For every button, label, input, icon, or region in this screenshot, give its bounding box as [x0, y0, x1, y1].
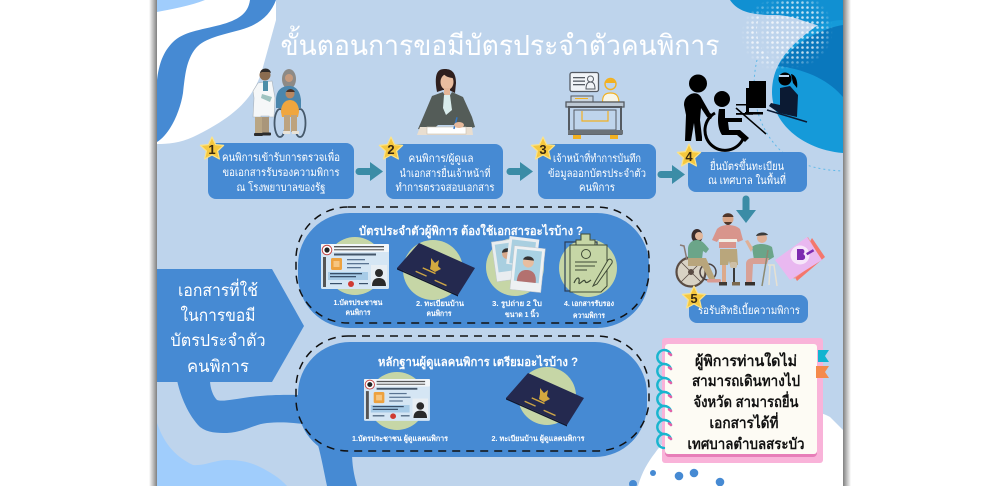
caregiver doc 1: ID card — [352, 372, 449, 444]
step 3 box — [538, 144, 656, 199]
step 5 box — [689, 295, 808, 323]
step 2 star badge — [379, 137, 403, 159]
side arrow label: documents used: บัตรประจำตัว — [170, 331, 266, 350]
illustration: woman writing at desk — [417, 69, 475, 135]
arrow 3 to 4 — [658, 165, 685, 184]
decorative bottom-right hill with dots — [629, 408, 843, 486]
note text: เทศบาลตำบลสระบัว — [688, 436, 804, 453]
doc 4: disability certificate clipboard — [559, 234, 617, 320]
caregiver doc 1: ID card: 1.บัตรประชาชน ผู้ดูแลคนพิการ — [352, 434, 449, 444]
doc 3: photos — [486, 236, 545, 319]
side arrow label: documents used: คนพิการ — [187, 357, 249, 376]
step 5 box: รอรับสิทธิเบี้ยความพิการ — [698, 302, 800, 317]
page shadow right — [843, 0, 851, 486]
doc 3: photos: ขนาด 1 นิ้ว — [505, 308, 539, 319]
step 4 box — [688, 152, 807, 192]
caregiver doc 2: house registration — [492, 367, 585, 444]
step 3 star badge — [531, 137, 555, 159]
step 5 star badge — [682, 286, 706, 308]
decorative bottom-left wave — [157, 380, 357, 486]
panel: caregiver documents — [296, 336, 649, 457]
step 4 star badge — [677, 144, 701, 166]
note text: เอกสารได้ที่ — [710, 412, 779, 432]
decorative top-left swoosh — [157, 0, 276, 144]
arrow 2 to 3 — [507, 162, 533, 181]
step 3 box: เจ้าหน้าที่ทำการบันทึก — [553, 150, 641, 165]
step 5 star badge: 5 — [690, 291, 698, 306]
step 1 box: คนพิการเข้ารับการตรวจเพื่อ — [222, 149, 340, 164]
doc 2: house registration: คนพิการ — [426, 309, 452, 318]
note text: ผู้พิการท่านใดไม่ — [695, 351, 797, 371]
step 2 box: นำเอกสารยื่นเจ้าหน้าที่ — [400, 165, 490, 180]
step 3 star badge: 3 — [539, 142, 547, 157]
note text: จังหวัด สามารถยื่น — [694, 391, 799, 411]
step 3 box: ข้อมูลออกบัตรประจำตัว — [548, 168, 646, 180]
illustration: wheelchair user and assistant at counter — [684, 72, 807, 150]
panel: documents for disability card — [296, 207, 649, 328]
doc 3: photos: 3. รูปถ่าย 2 ใบ — [492, 299, 542, 309]
note spiral rings — [657, 350, 671, 448]
doc 2: house registration — [397, 240, 475, 318]
step 1 star badge: 1 — [208, 142, 216, 157]
step 2 star badge: 2 — [387, 142, 395, 157]
step 1 box: ณ โรงพยาบาลของรัฐ — [236, 180, 326, 194]
doc 1: ID card — [321, 237, 389, 317]
caregiver doc 2: house registration: 2. ทะเบียนบ้าน ผู้ดูแลคนพิการ — [492, 434, 585, 444]
step 4 box: ยื่นบัตรขึ้นทะเบียน — [710, 158, 784, 173]
arrow 1 to 2 — [356, 162, 383, 181]
title: ขั้นตอนการขอมีบัตรประจำตัวคนพิการ — [280, 25, 720, 61]
arrow 4 to 5 — [736, 196, 756, 223]
side arrow label: documents used: ในการขอมี — [180, 305, 256, 325]
panel 1 heading: บัตรประจำตัวผู้พิการ ต้องใช้เอกสารอะไรบ้าง ? — [359, 223, 583, 239]
step 2 box: คนพิการ/ผู้ดูแล — [408, 153, 474, 165]
step 4 box: ณ เทศบาล ในพื้นที่ — [708, 172, 786, 187]
callout note — [657, 338, 829, 463]
doc 1: ID card: 1.บัตรประชาชน — [334, 298, 383, 307]
step 4 star badge: 4 — [685, 149, 693, 164]
illustration: doctor with woman and boy in wheelchair — [253, 68, 306, 137]
doc 1: ID card: คนพิการ — [346, 308, 371, 317]
step 2 box — [386, 144, 503, 199]
illustration: banknotes — [775, 237, 825, 281]
step 3 box: คนพิการ — [579, 182, 615, 194]
doc 4: disability certificate clipboard: ความพิการ — [573, 311, 606, 320]
background panel — [157, 0, 843, 486]
note text: สามารถเดินทางไป — [692, 371, 800, 390]
page shadow left — [149, 0, 157, 486]
step 2 box: ทำการตรวจสอบเอกสาร — [396, 182, 495, 194]
step 1 star badge — [200, 137, 224, 159]
decorative top-right blobs — [730, 0, 843, 171]
side arrow label: documents used: เอกสารที่ใช้ — [178, 278, 258, 300]
side arrow label: documents used — [157, 269, 304, 382]
doc 4: disability certificate clipboard: 4. เอกสารรับรอง — [564, 299, 614, 308]
note text — [688, 351, 804, 453]
step 1 box: ขอเอกสารรับรองความพิการ — [222, 167, 340, 179]
step 1 box — [208, 143, 354, 199]
illustration: three people with disabilities — [676, 213, 777, 286]
doc 2: house registration: 2. ทะเบียนบ้าน — [416, 299, 465, 308]
panel 2 heading: หลักฐานผู้ดูแลคนพิการ เตรียมอะไรบ้าง ? — [378, 354, 578, 370]
note ribbons — [816, 350, 829, 378]
illustration: officer at desk with ID board — [566, 72, 624, 139]
